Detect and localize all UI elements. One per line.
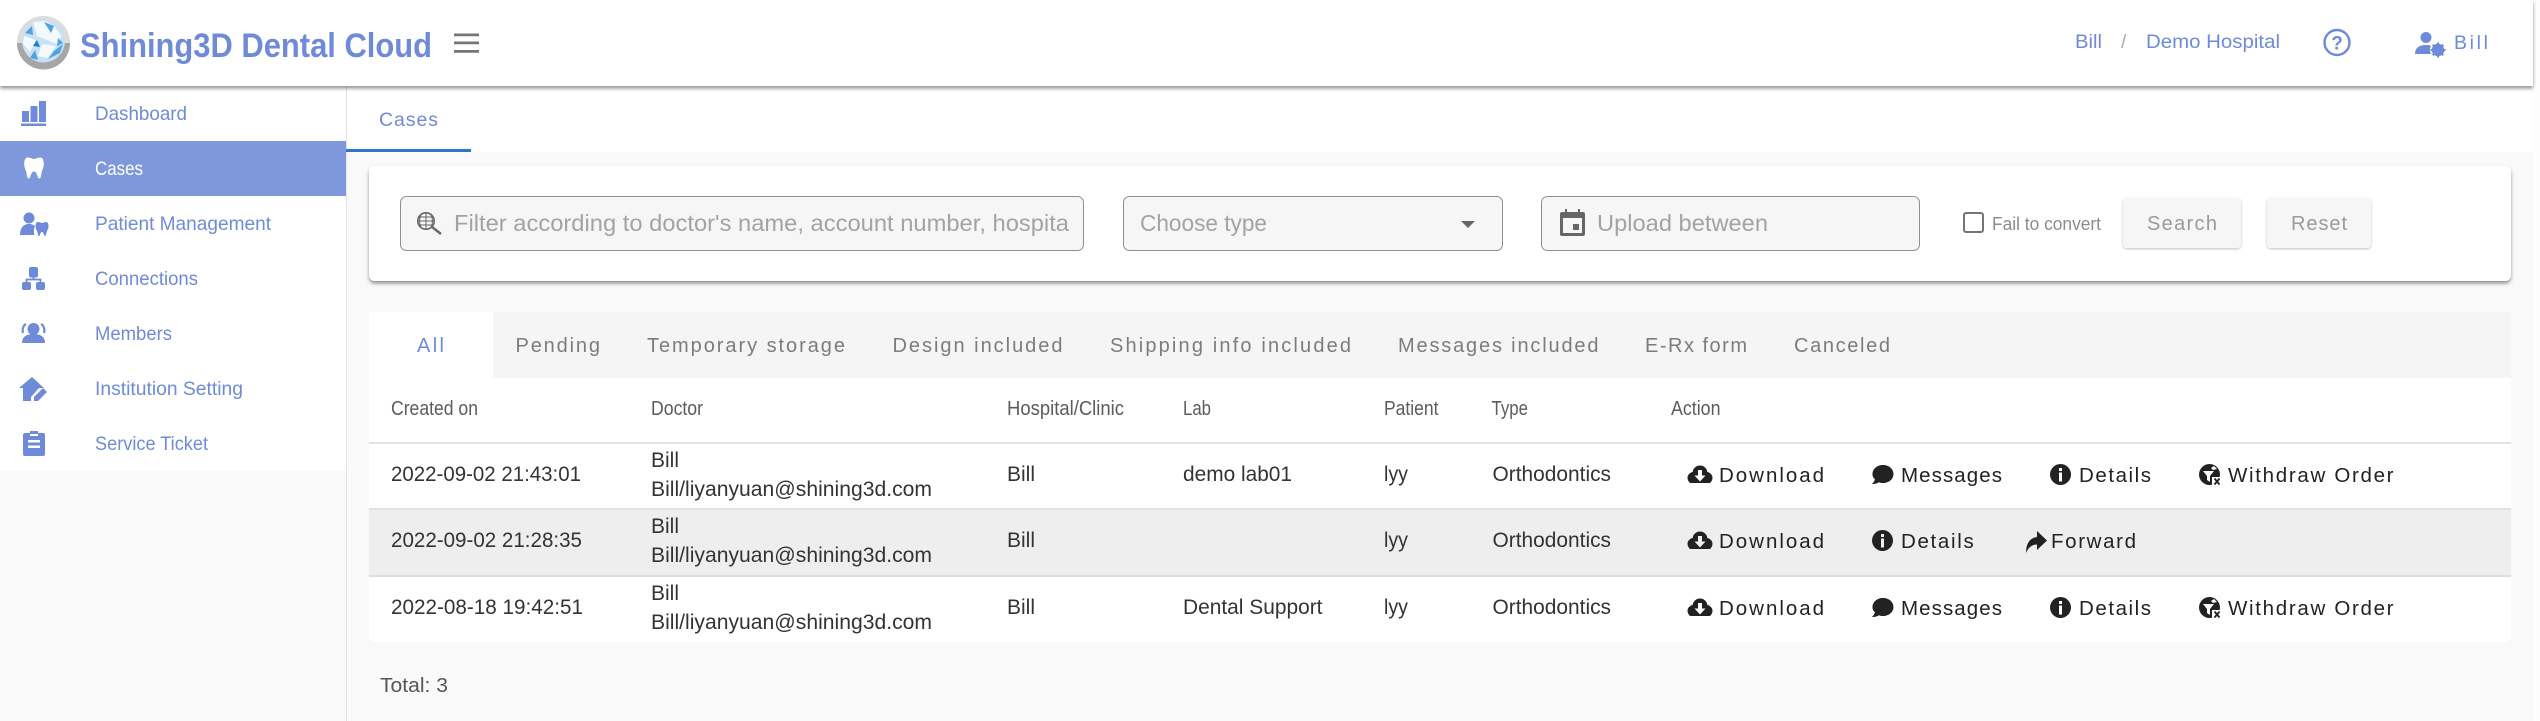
table row 1: 2022-09-02 21:43:01: [391, 463, 581, 486]
user menu: [2415, 32, 2488, 58]
total count: Total: 3: [380, 674, 448, 697]
page tab bar: Cases: Cases: [379, 109, 438, 131]
action: download: Download: [1719, 597, 1824, 620]
button: Reset: [2267, 198, 2371, 248]
filter input: Filter according to doctor's name, account number, hospita: [454, 210, 1069, 236]
action: withdraw order: Withdraw Order: [2228, 597, 2394, 620]
button: Reset: Reset: [2291, 213, 2347, 235]
status tabs: Messages included: [1398, 335, 1598, 357]
action: details: Details: [2079, 464, 2151, 487]
action: details: Details: [2079, 597, 2151, 620]
action: download: Download: [1719, 464, 1824, 487]
table row 1: demo lab01: [1183, 463, 1292, 486]
filter input: [400, 196, 1084, 250]
button: Search: [2123, 198, 2241, 248]
table row 2: 2022-09-02 21:28:35: [391, 529, 582, 552]
nav item: Connections: Connections: [95, 268, 198, 290]
type select: Choose type: [1140, 210, 1267, 236]
table row 1: Bill/liyanyuan@shining3d.com: [651, 478, 932, 501]
breadcrumb: account and hospital: Bill: [2075, 31, 2102, 53]
nav item: Dashboard: Dashboard: [95, 103, 187, 125]
nav item: Dashboard: [21, 101, 187, 126]
table header row: Type: [1492, 398, 1528, 420]
nav item: Service Ticket: [23, 431, 209, 456]
nav item: Service Ticket: Service Ticket: [95, 433, 209, 455]
table row 3: Bill: [1007, 596, 1035, 619]
table row 3: [391, 582, 2394, 634]
nav item: Members: [22, 323, 172, 345]
nav item: Institution Setting: [19, 377, 243, 401]
icon: help: ?: [2331, 34, 2343, 54]
page tab bar: Cases: [346, 86, 2533, 152]
checkbox: fail to convert: Fail to convert: [1992, 214, 2101, 234]
icon: globe search: [418, 213, 441, 234]
icon: hamburger menu: [454, 34, 479, 53]
nav item: Cases (active): [0, 141, 346, 196]
nav item: Connections: [22, 267, 198, 290]
table header row: Hospital/Clinic: [1007, 398, 1124, 420]
table row 1: Bill: [1007, 463, 1035, 486]
table row 3: Bill/liyanyuan@shining3d.com: [651, 611, 932, 634]
status tabs: Design included: [892, 335, 1062, 357]
table row 3: lyy: [1384, 596, 1408, 619]
table header row: Lab: [1183, 398, 1211, 420]
table row 3: Orthodontics: [1492, 596, 1611, 619]
action: messages: Messages: [1901, 464, 2002, 487]
table row 2: Orthodontics: [1492, 529, 1611, 552]
action: forward: Forward: [2051, 530, 2136, 553]
table header row: Created on: [391, 398, 478, 420]
table header row: Doctor: [651, 398, 703, 420]
sidebar navigation: [0, 86, 347, 721]
top header bar: [0, 0, 2533, 86]
button: Search: Search: [2147, 213, 2217, 235]
table row 1: Bill: [651, 449, 679, 472]
status tabs: Shipping info included: [1110, 335, 1351, 357]
table row 3: 2022-08-18 19:42:51: [391, 596, 583, 619]
nav item: Patient Management: [20, 212, 272, 236]
breadcrumb: account and hospital: [2075, 31, 2280, 53]
table row 2: Bill: [1007, 529, 1035, 552]
action: withdraw order: Withdraw Order: [2228, 464, 2394, 487]
status tabs: Canceled: [1794, 335, 1890, 357]
action: download: Download: [1719, 530, 1824, 553]
table row 1: Orthodontics: [1492, 463, 1611, 486]
title: Shining3D Dental Cloud: [80, 27, 432, 65]
icon: Shining3D logo: [17, 16, 70, 70]
nav item: Institution Setting: Institution Setting: [95, 378, 243, 400]
nav item: Cases (active): Cases: [95, 158, 143, 180]
table row 2: Bill: [651, 515, 679, 538]
status tabs: Temporary storage: [647, 335, 845, 357]
upload date range: Upload between: [1597, 210, 1768, 236]
table row 1: [391, 449, 2394, 501]
upload date range: [1542, 196, 1920, 250]
table row 2: Bill/liyanyuan@shining3d.com: [651, 544, 932, 567]
icon: help: [2324, 30, 2350, 55]
status tabs: All: [417, 335, 444, 357]
nav item: Patient Management: Patient Management: [95, 213, 272, 235]
table row 3: Bill: [651, 582, 679, 605]
panel: search filters: [369, 166, 2511, 281]
type select: [1124, 196, 1502, 250]
table header row: [391, 398, 1720, 420]
table row 2: [391, 515, 2136, 567]
table row 3: Dental Support: [1183, 596, 1323, 619]
nav item: Members: Members: [95, 323, 172, 345]
table row 1: lyy: [1384, 463, 1408, 486]
status tabs: Pending: [516, 335, 600, 357]
user menu: Bill: [2454, 32, 2488, 54]
action: details: Details: [1901, 530, 1974, 553]
status tabs: [369, 312, 2511, 378]
breadcrumb: account and hospital: /: [2121, 32, 2127, 53]
status tabs: E-Rx form: [1645, 335, 1747, 357]
action: messages: Messages: [1901, 597, 2002, 620]
table header row: Action: [1671, 398, 1720, 420]
panel: cases table: [369, 378, 2511, 642]
table row 2: lyy: [1384, 529, 1408, 552]
table header row: Patient: [1384, 398, 1439, 420]
breadcrumb: account and hospital: Demo Hospital: [2146, 31, 2280, 53]
